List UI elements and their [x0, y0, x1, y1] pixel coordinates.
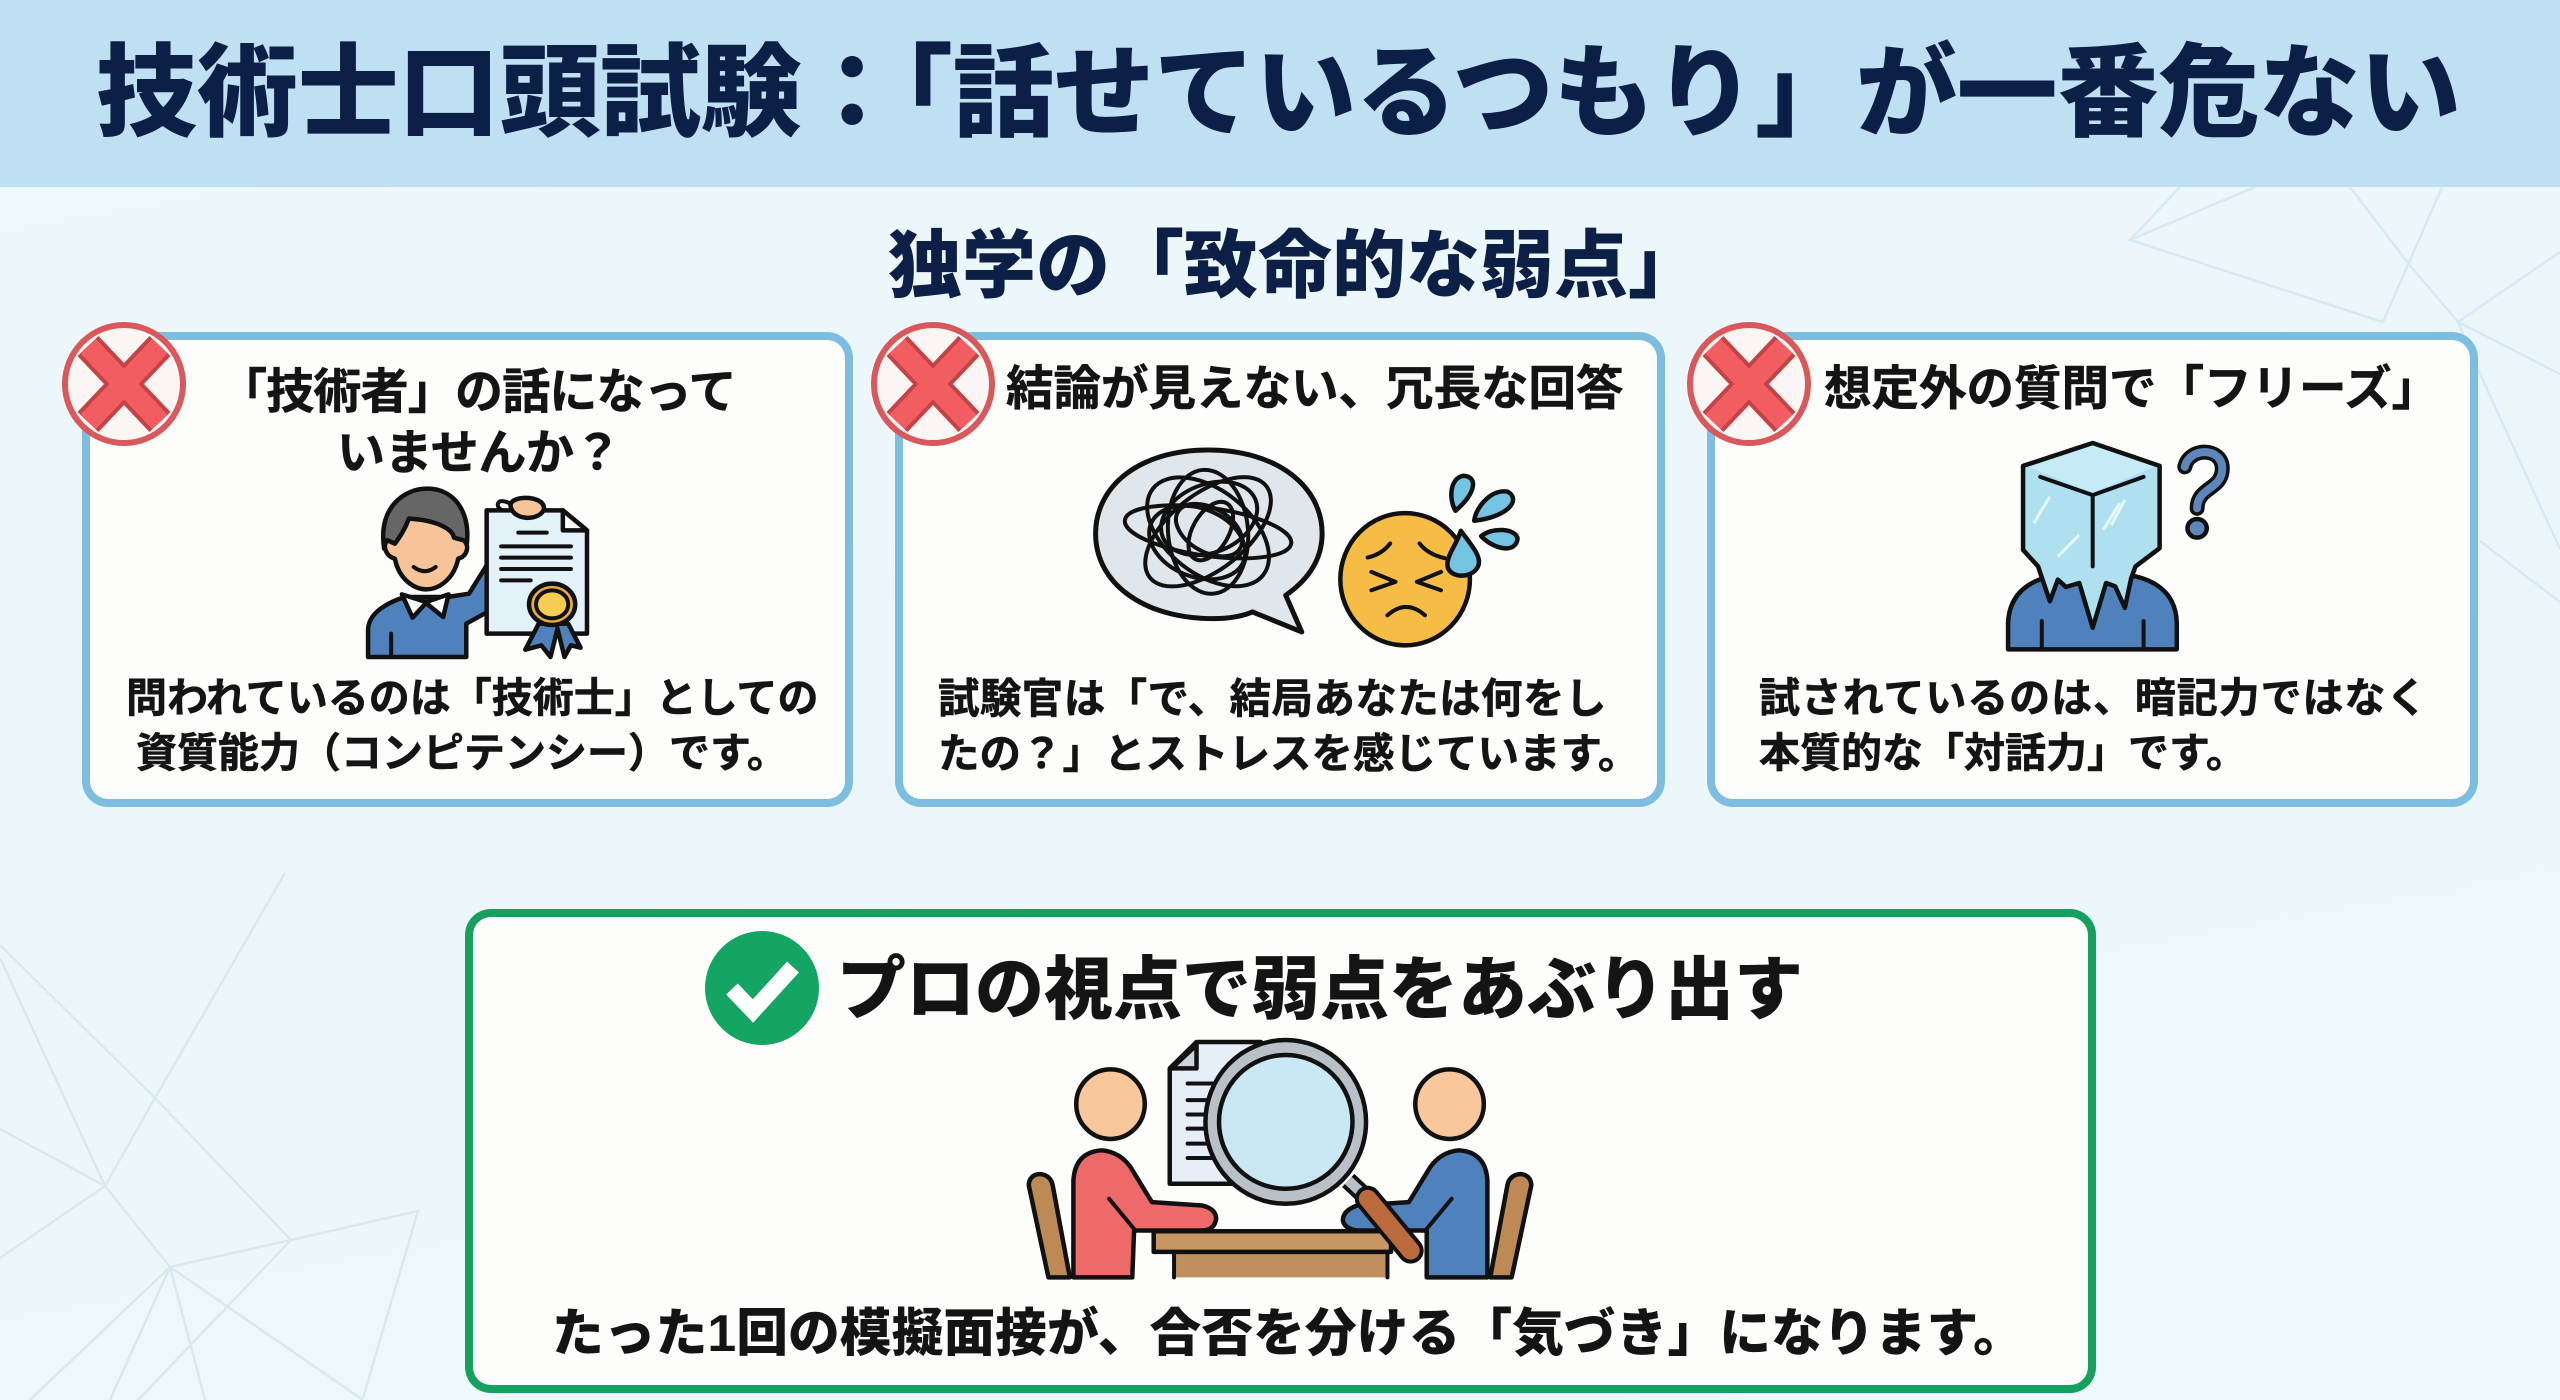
heading: solution: プロの視点で弱点をあぶり出す	[837, 951, 1803, 1028]
table	[1154, 1231, 1391, 1277]
subtitle: 独学の「致命的な弱点」	[888, 224, 1702, 307]
face	[1340, 513, 1470, 645]
right person	[1415, 1069, 1484, 1139]
body text: card 1	[126, 675, 818, 776]
heading: card 1: いませんか？	[337, 427, 621, 480]
panel: solution	[465, 909, 2096, 1393]
heading: card 1: 「技術者」の話になって	[219, 366, 736, 419]
question mark	[2185, 452, 2222, 508]
ice cube	[2023, 443, 2160, 628]
body text: card 2: 試験官は「で、結局あなたは何をし	[938, 675, 1607, 722]
title: 技術士口頭試験：「話せているつもり」が一番危ない	[96, 38, 2461, 150]
icon: red cross	[871, 322, 995, 446]
body text: card 3	[1759, 675, 2428, 776]
seal	[529, 584, 575, 625]
body text: card 1: 問われているのは「技術士」としての	[126, 675, 818, 721]
left person	[1076, 1069, 1145, 1139]
head	[383, 489, 467, 549]
heading: card 2: 結論が見えない、冗長な回答	[1006, 363, 1624, 416]
panel: weakness 2	[895, 332, 1665, 807]
icon: red cross	[62, 322, 186, 446]
body text: solution: たった1回の模擬面接が、合否を分ける「気づき」になります。	[552, 1304, 2025, 1362]
sweat drops	[1447, 531, 1479, 576]
icon: red cross	[1687, 322, 1811, 446]
body text: card 3: 試されているのは、暗記力ではなく	[1759, 675, 2428, 721]
heading: card 1	[219, 366, 736, 480]
icon: green check	[705, 931, 819, 1045]
illustration: mock interview with magnifier	[1026, 1038, 1534, 1280]
speech bubble	[1096, 450, 1322, 632]
magnifier	[1205, 1040, 1411, 1251]
body	[2008, 576, 2177, 649]
chairs	[1029, 1174, 1070, 1277]
ribbon	[525, 624, 581, 657]
header band	[0, 0, 2560, 187]
certificate	[487, 510, 587, 634]
hand	[510, 498, 544, 518]
panel: weakness 1	[82, 332, 853, 807]
illustration: frozen head	[2006, 440, 2230, 652]
body text: card 1: 資質能力（コンピテンシー）です。	[136, 730, 788, 776]
body text: card 2: たの？」とストレスを感じています。	[938, 730, 1639, 777]
illustration: person holding certificate	[366, 486, 590, 660]
collar	[402, 594, 449, 618]
body text: card 2	[938, 675, 1639, 777]
panel: weakness 3	[1707, 332, 2478, 807]
document	[1170, 1042, 1261, 1184]
heading: card 3: 想定外の質問で「フリーズ」	[1824, 363, 2439, 416]
illustration: tangled speech bubble and sweating face	[1093, 448, 1520, 648]
tangle	[1122, 455, 1295, 608]
body text: card 3: 本質的な「対話力」です。	[1759, 730, 2247, 776]
person body	[368, 564, 490, 657]
